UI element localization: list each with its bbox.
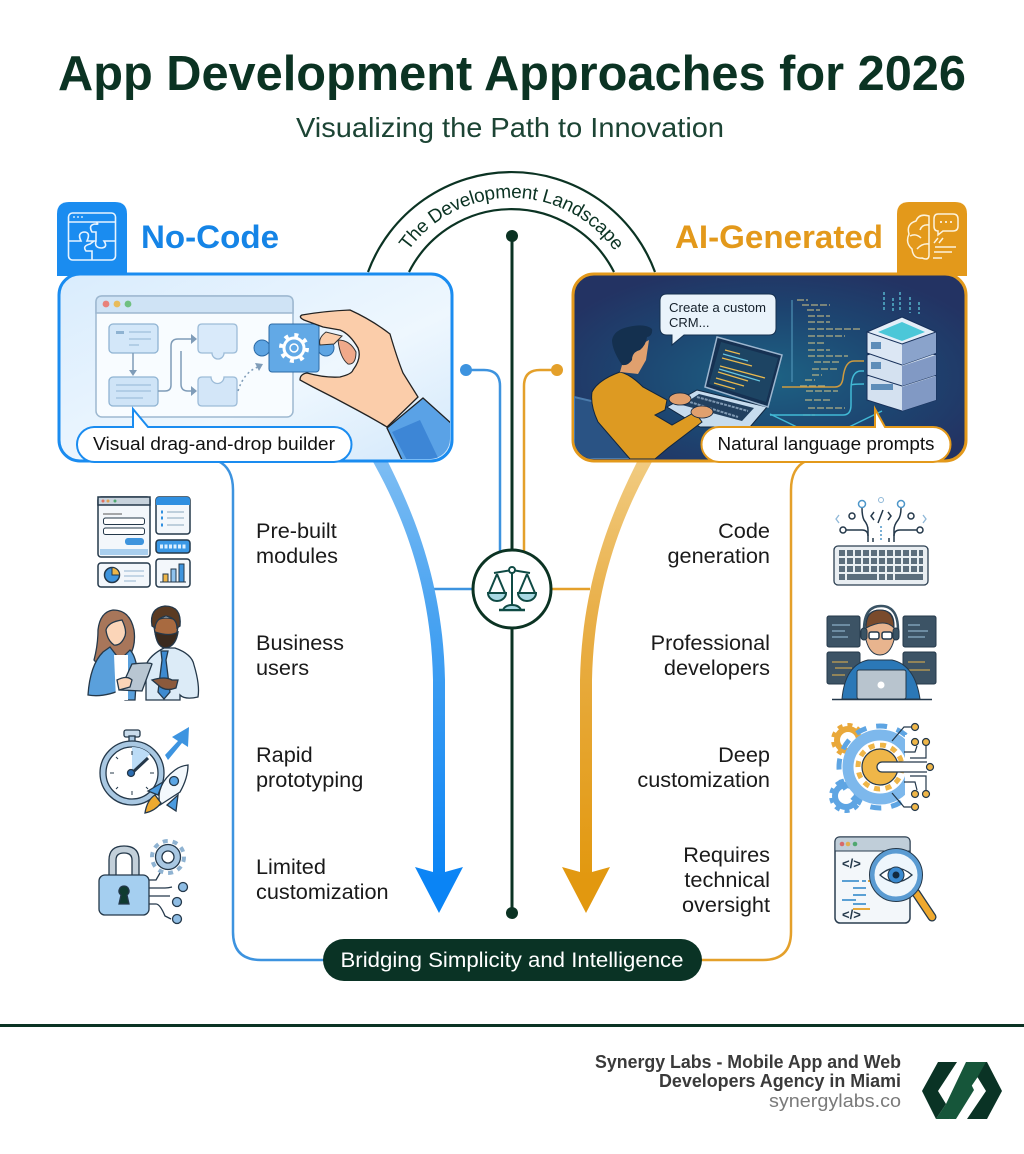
pill: bridging simplicity and intelligence <box>323 939 702 981</box>
icon: professional developers <box>827 606 936 700</box>
icon: business users <box>88 606 198 700</box>
subtitle: Visualizing the Path to Innovation <box>296 112 724 143</box>
footer: company text: Developers Agency in Miami <box>659 1071 901 1091</box>
label: rapid prototyping: prototyping <box>256 767 363 792</box>
label: requires technical oversight: oversight <box>682 892 770 917</box>
icon tab: ai brain <box>897 202 967 276</box>
heading: ai-generated: AI-Generated <box>675 219 883 255</box>
label: professional developers: Professional <box>651 630 770 655</box>
connector: blue panel to scale <box>432 364 500 589</box>
icon: limited customization <box>99 841 188 924</box>
speech bubble: create a custom crm: CRM... <box>669 315 709 330</box>
footer: company text: Synergy Labs - Mobile App and Web <box>595 1052 901 1072</box>
label pill: visual drag-and-drop builder <box>77 409 352 462</box>
label: professional developers: developers <box>664 655 770 680</box>
label: deep customization: Deep <box>718 742 770 767</box>
footer: company text: synergylabs.co <box>769 1091 901 1111</box>
label pill: visual drag-and-drop builder: Visual drag-and-drop builder <box>93 433 335 454</box>
connector: orange panel to scale <box>524 364 590 589</box>
icon: balance scale <box>473 550 551 628</box>
label: code generation: generation <box>668 543 770 568</box>
label pill: natural language prompts <box>702 409 950 462</box>
arc: the development landscape: The Development Landscape <box>398 188 621 250</box>
illustration: server stack <box>867 292 936 411</box>
footer rule <box>0 1024 1024 1027</box>
icon: code review magnifier <box>835 837 932 923</box>
panel: no-code <box>57 202 452 462</box>
label: business users: users <box>256 655 309 680</box>
illustration: developer at laptop <box>574 325 782 459</box>
arc: the development landscape <box>367 171 656 272</box>
label: requires technical oversight: technical <box>684 867 770 892</box>
heading: no-code: No-Code <box>141 219 279 255</box>
label pill: natural language prompts: Natural language prompts <box>718 433 934 454</box>
panel: ai-generated <box>573 202 967 462</box>
label: limited customization: Limited <box>256 854 326 879</box>
footer: company text <box>595 1052 901 1111</box>
icon: pre-built modules <box>98 497 190 587</box>
central spine line <box>506 230 518 919</box>
label: pre-built modules: modules <box>256 543 338 568</box>
label: limited customization: customization <box>256 879 389 904</box>
illustration: hand holding puzzle piece <box>254 310 452 462</box>
icon: code review magnifier: </> <box>842 907 861 922</box>
speech bubble: create a custom crm <box>660 294 776 345</box>
icon: code generation <box>834 498 928 585</box>
connector: blue outer line to pill <box>218 461 330 960</box>
label: requires technical oversight: Requires <box>683 842 770 867</box>
label: deep customization: customization <box>637 767 770 792</box>
connector: orange outer line to pill <box>695 461 806 960</box>
icon: synergy labs logo <box>922 1062 1002 1119</box>
label: pre-built modules: Pre-built <box>256 518 337 543</box>
arrow: no-code flow <box>372 460 463 913</box>
icon tab: no-code puzzle <box>57 202 127 276</box>
icon: deep customization <box>831 724 934 811</box>
pill: bridging simplicity and intelligence: Bridging Simplicity and Intelligence <box>340 949 684 972</box>
label: code generation: Code <box>718 518 770 543</box>
icon: code review magnifier: </> <box>842 856 861 871</box>
label: business users: Business <box>256 630 344 655</box>
label: rapid prototyping: Rapid <box>256 742 313 767</box>
illustration: generated code lines <box>770 300 882 427</box>
title: App Development Approaches for 2026 <box>58 47 966 101</box>
illustration: drag and drop canvas <box>96 296 293 417</box>
icon: rapid prototyping <box>100 727 189 813</box>
speech bubble: create a custom crm: Create a custom <box>669 300 766 315</box>
arrow: ai-generated flow <box>562 460 653 913</box>
